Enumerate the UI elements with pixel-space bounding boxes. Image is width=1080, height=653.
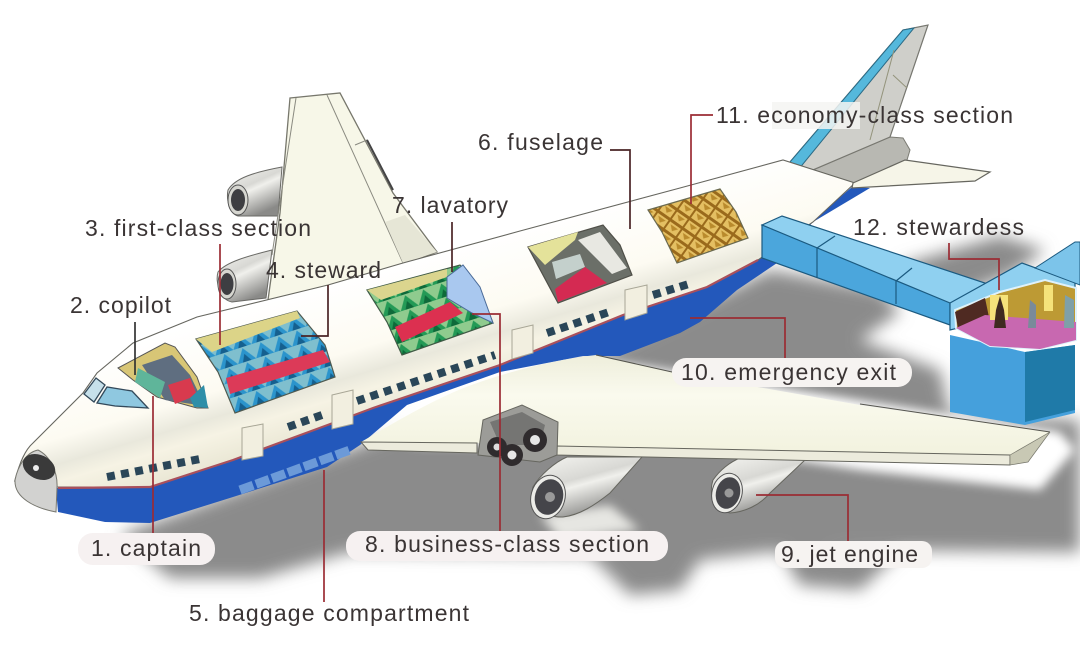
label: 6. fuselage: 6. fuselage xyxy=(478,129,603,155)
engine 2 xyxy=(707,458,805,516)
label: 2. copilot: 2. copilot xyxy=(70,292,172,318)
far engine lower xyxy=(217,250,272,302)
label: 3. first-class section: 3. first-class section xyxy=(85,215,311,241)
label: 7. lavatory: 7. lavatory xyxy=(392,192,508,218)
passenger windows xyxy=(107,283,692,477)
cabin: first class xyxy=(196,311,335,413)
baggage doors xyxy=(240,450,350,490)
cabin: business class xyxy=(367,265,493,355)
label: 1. captain: 1. captain xyxy=(91,535,201,561)
label: 1. captain xyxy=(78,533,215,565)
near wing with landing gear and engines xyxy=(361,355,1050,523)
tail cone and fin xyxy=(808,137,910,190)
terminal roof xyxy=(950,263,1075,330)
leader lines xyxy=(135,115,999,602)
far wing with engines xyxy=(217,93,437,302)
red aisle xyxy=(226,350,330,394)
tail plane xyxy=(852,160,990,188)
far wing xyxy=(268,93,437,300)
label: 5. baggage compartment: 5. baggage compartment xyxy=(189,600,470,626)
fuselage xyxy=(15,160,870,523)
label: 12. stewardess: 12. stewardess xyxy=(853,214,1024,240)
ground shadow xyxy=(120,236,1080,595)
far engine upper xyxy=(227,167,282,216)
red aisle xyxy=(395,302,463,342)
wing surface xyxy=(361,355,1050,456)
tail xyxy=(778,25,928,190)
cabin: cockpit xyxy=(118,343,208,408)
fin leading edge stripe xyxy=(778,28,914,176)
windshield xyxy=(84,378,148,408)
stewardess xyxy=(994,296,1006,328)
label: 10. emergency exit: 10. emergency exit xyxy=(681,359,897,385)
red stripe xyxy=(58,260,758,488)
radome xyxy=(19,449,59,485)
wing trailing edge xyxy=(361,442,1010,465)
landing gear xyxy=(478,405,558,466)
label: 9. jet engine: 9. jet engine xyxy=(781,541,918,567)
label: 11. economy-class section: 11. economy-class section xyxy=(716,102,1013,128)
cabin: economy class xyxy=(648,189,748,263)
terminal and jet bridge xyxy=(762,216,1080,425)
label: 8. business-class section: 8. business-class section xyxy=(365,531,649,557)
terminal body xyxy=(950,335,1075,425)
jet bridge xyxy=(762,216,1000,305)
nose cone xyxy=(15,450,57,512)
blue belly xyxy=(56,187,870,523)
terminal interior xyxy=(955,280,1076,349)
cabin: galley xyxy=(528,225,632,303)
engine 1 xyxy=(526,457,642,523)
doors xyxy=(242,285,647,460)
lavatory compartment xyxy=(447,265,493,323)
white upper body xyxy=(15,160,855,487)
label: 4. steward: 4. steward xyxy=(266,257,381,283)
white halo around wing xyxy=(370,358,1075,490)
